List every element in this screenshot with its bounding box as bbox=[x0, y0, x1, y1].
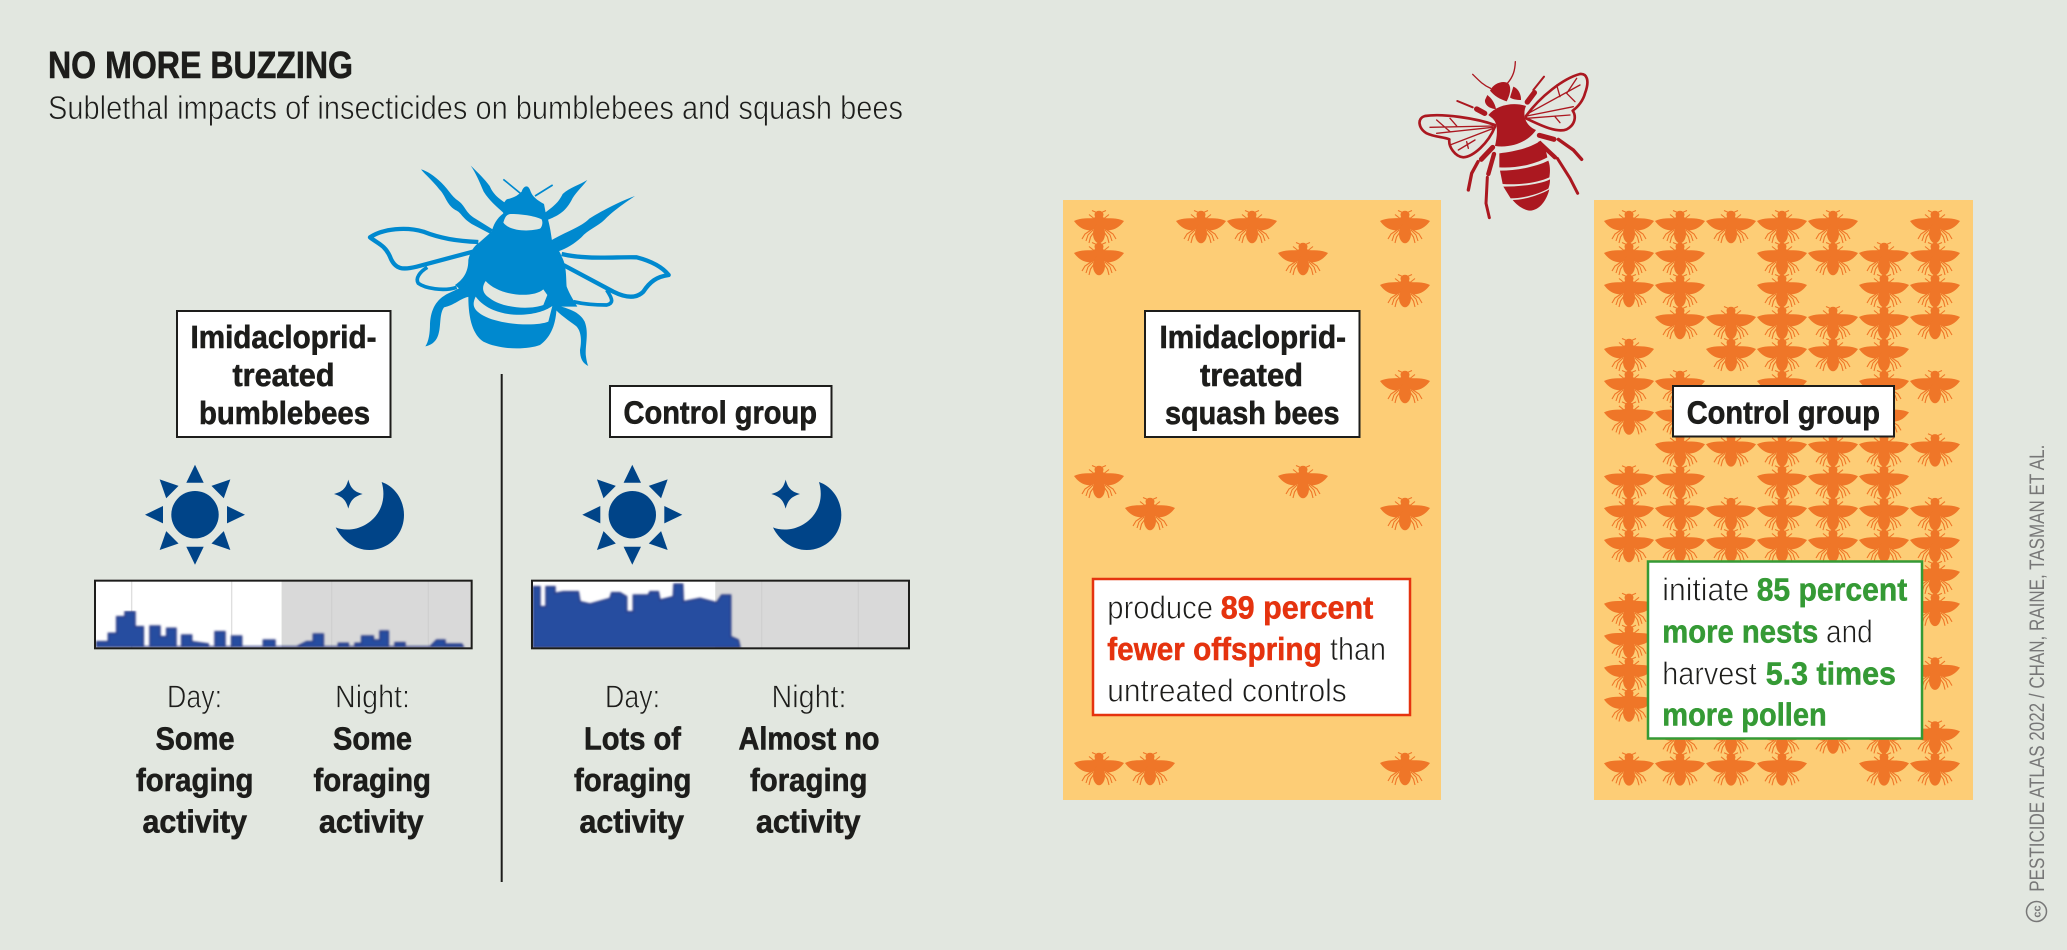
text: treated day: foraging bbox=[136, 762, 254, 798]
icon: sun, control day bbox=[582, 465, 682, 565]
vertical divider bbox=[501, 374, 503, 882]
label: control group, squash bees bbox=[1673, 386, 1894, 436]
text: control night: activity bbox=[756, 803, 861, 839]
title: NO MORE BUZZING bbox=[48, 45, 353, 87]
callout: fewer offspring: produce bbox=[1107, 589, 1213, 625]
text: treated day bbox=[136, 678, 254, 839]
icon: moon, treated night bbox=[334, 480, 404, 550]
callout: fewer offspring: 89 percent bbox=[1221, 589, 1374, 625]
text: treated day: activity bbox=[142, 803, 247, 839]
text: treated night: Some bbox=[333, 720, 412, 756]
label: imidacloprid-treated bumblebees: treated bbox=[232, 357, 334, 393]
text: control day: Day: bbox=[605, 678, 660, 714]
credit line: cc bbox=[2032, 905, 2044, 918]
callout: more nests and pollen: 5.3 times bbox=[1766, 655, 1896, 691]
icon: moon, control night bbox=[771, 480, 841, 550]
text: treated day: Day: bbox=[167, 678, 222, 714]
callout: fewer offspring: fewer offspring bbox=[1107, 631, 1322, 667]
label: imidacloprid-treated squash bees: squash bees bbox=[1165, 395, 1340, 431]
text: treated night: Night: bbox=[335, 678, 410, 714]
label: imidacloprid-treated squash bees: treated bbox=[1200, 357, 1303, 393]
callout: more nests and pollen: more nests bbox=[1662, 613, 1818, 649]
text: control night bbox=[738, 678, 880, 839]
panel: imidacloprid-treated squash bees bbox=[1063, 200, 1441, 800]
subtitle: Sublethal impacts of insecticides on bumblebees and squash bees bbox=[48, 89, 903, 126]
callout: fewer offspring bbox=[1093, 579, 1410, 715]
icon: red squash bee bbox=[1420, 62, 1587, 218]
text: treated day: Some bbox=[156, 720, 234, 756]
callout: more nests and pollen: 85 percent bbox=[1757, 572, 1908, 608]
text: control night: foraging bbox=[750, 762, 868, 798]
text: treated night bbox=[314, 678, 431, 839]
callout: more nests and pollen: and bbox=[1826, 613, 1873, 649]
chart: treated bumblebee foraging activity bbox=[95, 581, 472, 648]
text: control day bbox=[574, 678, 692, 839]
text: control day: Lots of bbox=[584, 720, 681, 756]
bee field, control bbox=[1604, 210, 1960, 786]
label: control group, bumblebees: Control group bbox=[624, 394, 817, 430]
text: treated night: foraging bbox=[314, 762, 431, 798]
label: imidacloprid-treated bumblebees bbox=[177, 311, 390, 437]
callout: fewer offspring: than bbox=[1330, 631, 1386, 667]
label: imidacloprid-treated bumblebees: Imidacloprid- bbox=[190, 319, 376, 355]
callout: more nests and pollen bbox=[1648, 562, 1922, 738]
bee field, treated bbox=[1074, 210, 1430, 785]
label: imidacloprid-treated squash bees bbox=[1145, 311, 1360, 437]
credit line: PESTICIDE ATLAS 2022 / CHAN, RAINE, TASMAN ET AL. bbox=[2026, 445, 2049, 892]
text: control day: activity bbox=[580, 803, 684, 839]
label: imidacloprid-treated bumblebees: bumblebees bbox=[199, 395, 370, 431]
text: control night: Almost no bbox=[738, 720, 880, 756]
label: control group, bumblebees bbox=[610, 386, 832, 437]
text: control night: Night: bbox=[772, 678, 846, 714]
text: treated night: activity bbox=[319, 803, 424, 839]
text: control day: foraging bbox=[574, 762, 692, 798]
chart: control bumblebee foraging activity bbox=[532, 581, 909, 648]
label: control group, squash bees: Control group bbox=[1687, 394, 1880, 430]
label: imidacloprid-treated squash bees: Imidacloprid- bbox=[1160, 319, 1346, 355]
icon: blue bumblebee bbox=[370, 166, 669, 366]
callout: more nests and pollen: initiate bbox=[1662, 572, 1749, 608]
callout: more nests and pollen: more pollen bbox=[1662, 697, 1827, 733]
callout: more nests and pollen: harvest bbox=[1662, 655, 1757, 691]
callout: fewer offspring: untreated controls bbox=[1107, 673, 1347, 709]
panel: control group squash bees bbox=[1594, 200, 1973, 800]
icon: sun, treated day bbox=[145, 465, 245, 565]
